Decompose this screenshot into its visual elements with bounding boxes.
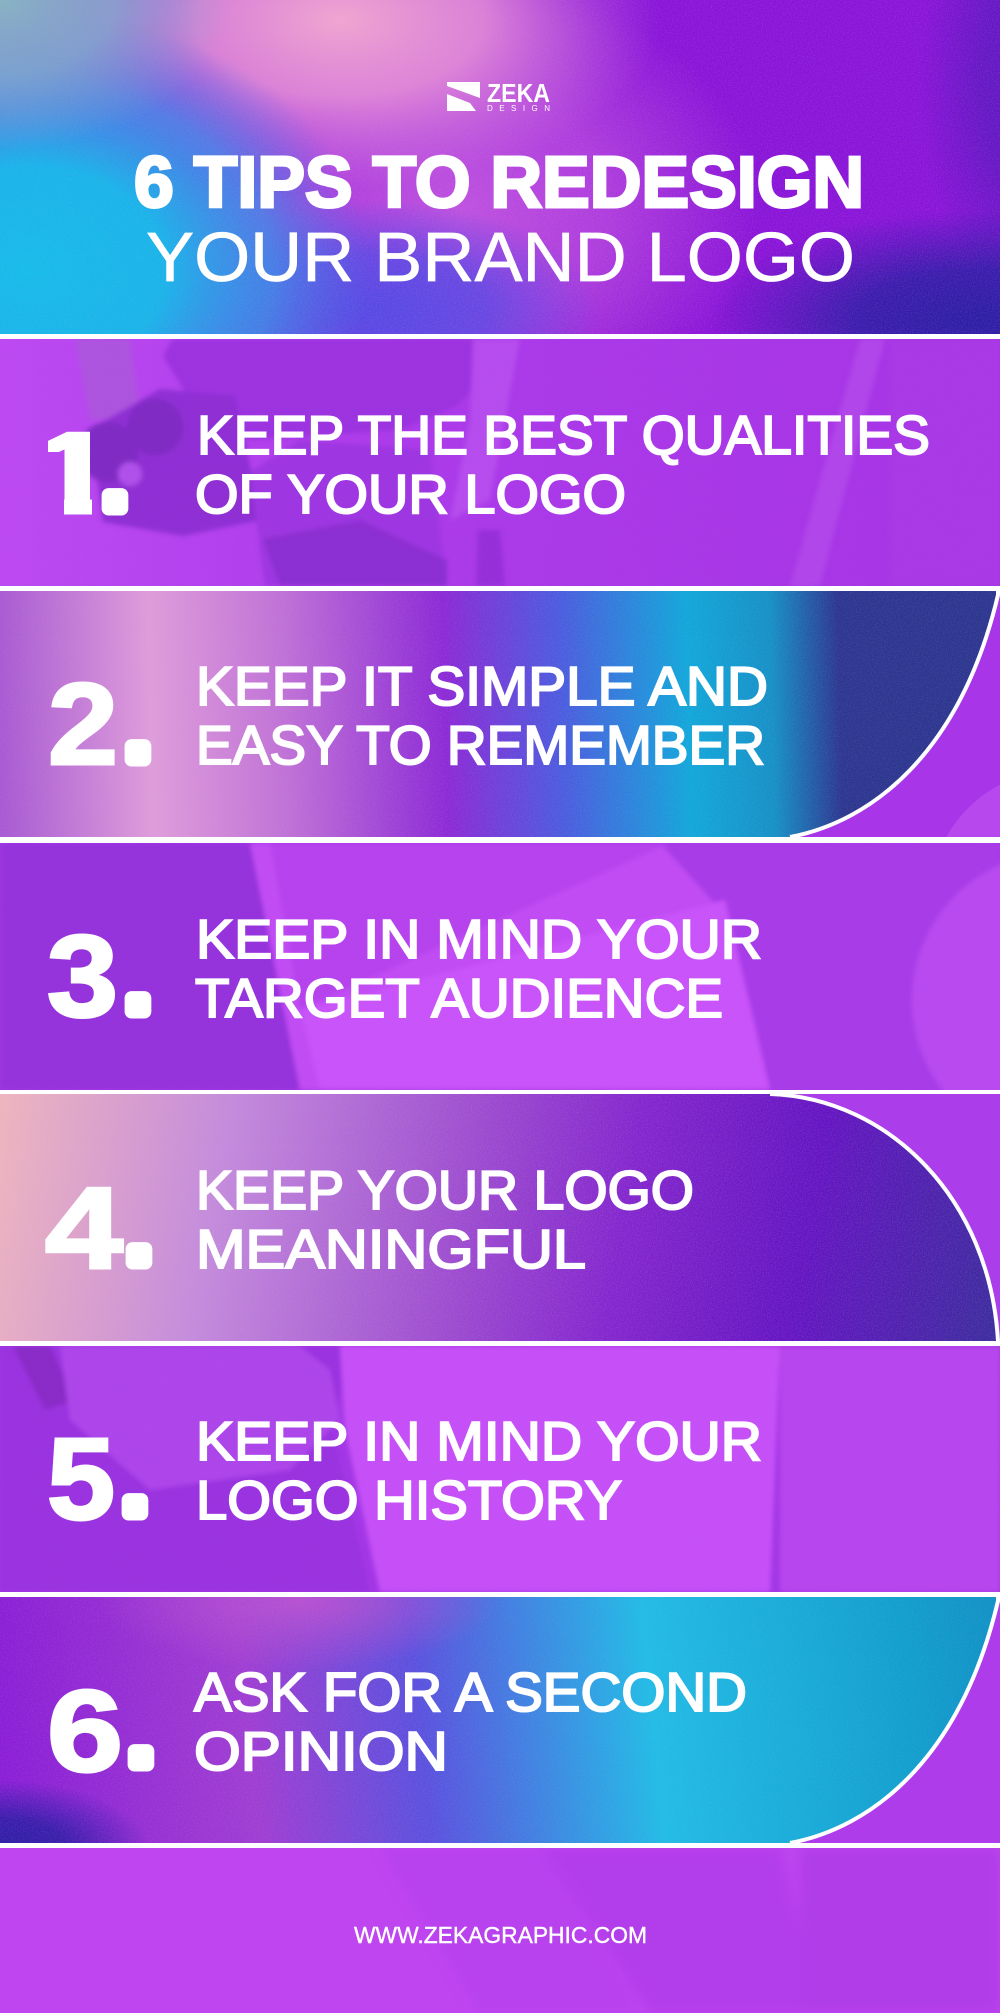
number 1: 1 [30, 408, 117, 538]
tip 1 text [195, 404, 930, 525]
tip 3 text [195, 908, 762, 1029]
number 5 [47, 1414, 148, 1544]
tip 1 text: OF YOUR LOGO [195, 463, 626, 525]
title: 6 TIPS TO REDESIGN [134, 143, 864, 223]
number 1 [48, 432, 128, 516]
tip 4 text [196, 1159, 694, 1280]
number 5: 5 [47, 1414, 115, 1544]
curve outline [790, 591, 998, 837]
tip 3 text: KEEP IN MIND YOUR [196, 908, 762, 970]
number 3 [47, 911, 151, 1041]
icon: Zeka logo mark [447, 82, 480, 111]
panel: tip 6 [0, 1597, 1000, 1843]
tip 3 text: TARGET AUDIENCE [195, 967, 723, 1029]
panel: tip 5 [0, 1346, 1000, 1592]
panel: header [0, 0, 1000, 334]
number 4: 4 [45, 1163, 123, 1293]
tip 2 text: EASY TO REMEMBER [196, 714, 765, 776]
number 6 [47, 1666, 154, 1796]
logo wordmark: ZEKA [487, 78, 550, 108]
number 4 [45, 1163, 152, 1293]
tip 5 text: LOGO HISTORY [196, 1469, 622, 1531]
panel: tip 4 [0, 1094, 1000, 1341]
tip 5 text: KEEP IN MIND YOUR [196, 1410, 762, 1472]
panel: tip 3 [0, 843, 1000, 1090]
title [134, 143, 864, 296]
number 2: 2 [48, 659, 118, 789]
logo wordmark: DESIGN [487, 104, 550, 113]
number 3: . [126, 932, 151, 1032]
panel: footer [0, 1848, 1000, 2013]
number 4: . [126, 1182, 152, 1282]
curve outline [790, 1597, 998, 1843]
tip 4 text: MEANINGFUL [196, 1218, 586, 1280]
number 6: . [128, 1684, 154, 1784]
tip 1 text: KEEP THE BEST QUALITIES [197, 404, 930, 466]
website url: WWW.ZEKAGRAPHIC.COM [354, 1922, 647, 1948]
panel: tip 2 [0, 591, 1000, 837]
number 1: . [102, 428, 128, 528]
number 6: 6 [47, 1666, 123, 1796]
tip 2 text [196, 655, 768, 776]
panel: tip 1 [0, 339, 1000, 586]
tip 2 text: KEEP IT SIMPLE AND [196, 655, 768, 717]
tip 6 text [194, 1661, 747, 1782]
curve outline [770, 1094, 998, 1341]
tip 6 text: ASK FOR A SECOND [194, 1661, 747, 1723]
number 3: 3 [47, 911, 118, 1041]
tip 6 text: OPINION [194, 1720, 448, 1782]
title: YOUR BRAND LOGO [146, 218, 855, 296]
tip 4 text: KEEP YOUR LOGO [196, 1159, 694, 1221]
number 2: . [126, 680, 151, 780]
tip 5 text [196, 1410, 762, 1531]
number 2 [48, 659, 151, 789]
number 5: . [122, 1434, 148, 1534]
